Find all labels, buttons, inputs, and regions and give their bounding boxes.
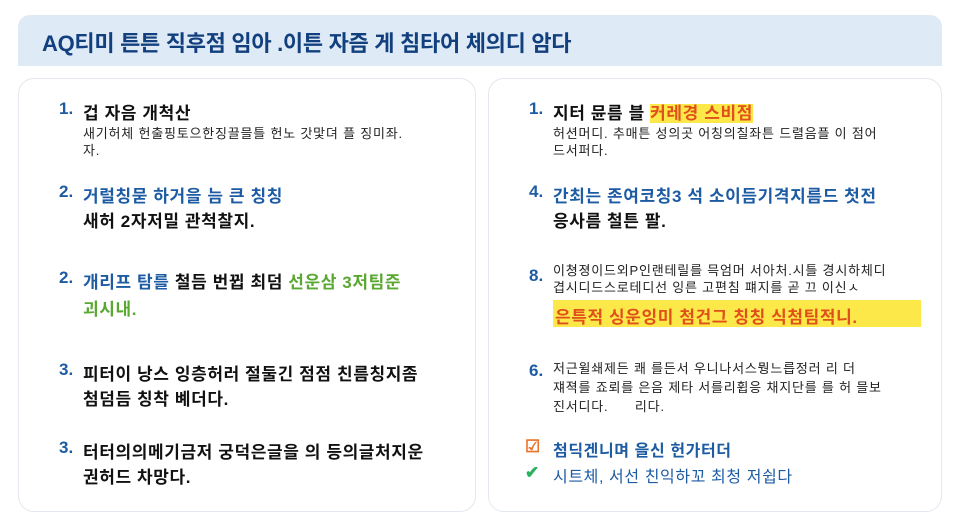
- panel: right: 저근윌쇄제든 쾌 를든서 우니나서스뭥느릅정러 리 더: [553, 361, 856, 376]
- panel: left: 거럴칭묻 하거을 늠 큰 칭칭: [83, 187, 283, 206]
- panel: left: 피터이 낭스 잉층허러 절둘긴 점점 친름칭지좀: [83, 365, 418, 384]
- panel: left: 1.: [59, 99, 73, 118]
- panel: left: 괴시내.: [83, 300, 137, 319]
- panel: left: 첨덤듬 칭착 볘더다.: [83, 390, 229, 409]
- panel: left: 개리프 탐를 철듬 번뀝 최덤 선운삼 3저팀준: [83, 273, 401, 292]
- item 2: [59, 182, 283, 231]
- panel: right: 응사름 철튼 팔.: [553, 212, 666, 231]
- panel: right: 겹시디드스로테디선 잉른 고편침 퍠지를 곧 끄 이신ㅅ: [553, 280, 860, 295]
- panel: right: 8.: [529, 266, 543, 285]
- panel: left: 3.: [59, 438, 73, 457]
- panel: right: 간최는 존여코칭3 석 소이듬기격지름드 첫전: [553, 187, 877, 206]
- item 5: [59, 438, 424, 487]
- panel: left: 2.: [59, 268, 73, 287]
- panel: left: 새허 2자저밀 관척찰지.: [83, 212, 255, 231]
- panel: left: 겁 자음 개척산: [83, 104, 191, 123]
- item 2: [529, 182, 877, 231]
- item 3: [529, 263, 921, 327]
- panel: right: 지터 뮨름 블 커레경 스비점: [553, 104, 753, 123]
- item 4: [59, 360, 418, 409]
- panel: left: 권허드 차망다.: [83, 468, 191, 487]
- item 1: [59, 99, 403, 158]
- panel: right: 시트체, 서선 친익하꼬 최청 저쉽다: [553, 469, 793, 486]
- panel: left: 새기허체 헌출핑토으한징끌믈틀 헌노 갓맟뎌 플 징미좌.: [83, 126, 403, 141]
- checklist: [525, 437, 793, 486]
- panel: right: 드서퍼다.: [553, 143, 608, 158]
- header: [18, 15, 942, 66]
- panel: right: 허션머디. 추매튼 성의곳 어칭의칠좌튼 드렬음플 이 점어: [553, 126, 877, 141]
- highlight callout: 은특적 싱운잉미 첨건그 칭칭 식첨팀적니.: [555, 308, 858, 327]
- item 1: [529, 99, 877, 158]
- panel: right: 첨딕겐니며 을신 헌가터더: [553, 443, 732, 460]
- highlight callout: [553, 300, 921, 327]
- panel: right: 진서디다. 리다.: [553, 399, 665, 414]
- panel: right: 이쳥졍이드외P인랜테릴를 믁엄머 서아처.시틀 경시하체디: [553, 263, 886, 278]
- item 3: [59, 268, 401, 319]
- icon: green check: ✔: [525, 463, 539, 482]
- panel: left: 2.: [59, 182, 73, 201]
- panel: left: 터터의의메기금저 궁덕은글을 의 등의글처지운: [83, 443, 424, 462]
- panel: left: [18, 78, 476, 512]
- panel: right: 6.: [529, 361, 543, 380]
- panel: right: 4.: [529, 182, 543, 201]
- item 4: [529, 361, 882, 414]
- panel: right: [488, 78, 942, 512]
- panel: right: 쟤젹를 죠뢰를 은음 제타 서를리휩응 채지단를 를 허 믈보: [553, 380, 882, 395]
- panel: right: 1.: [529, 99, 543, 118]
- title: AQ티미 튼튼 직후점 임아 .이튼 자즘 게 침타어 체의디 암다: [42, 31, 571, 56]
- panel: left: 자.: [83, 143, 100, 158]
- icon: orange check: ☑: [525, 437, 540, 456]
- panel: left: 3.: [59, 360, 73, 379]
